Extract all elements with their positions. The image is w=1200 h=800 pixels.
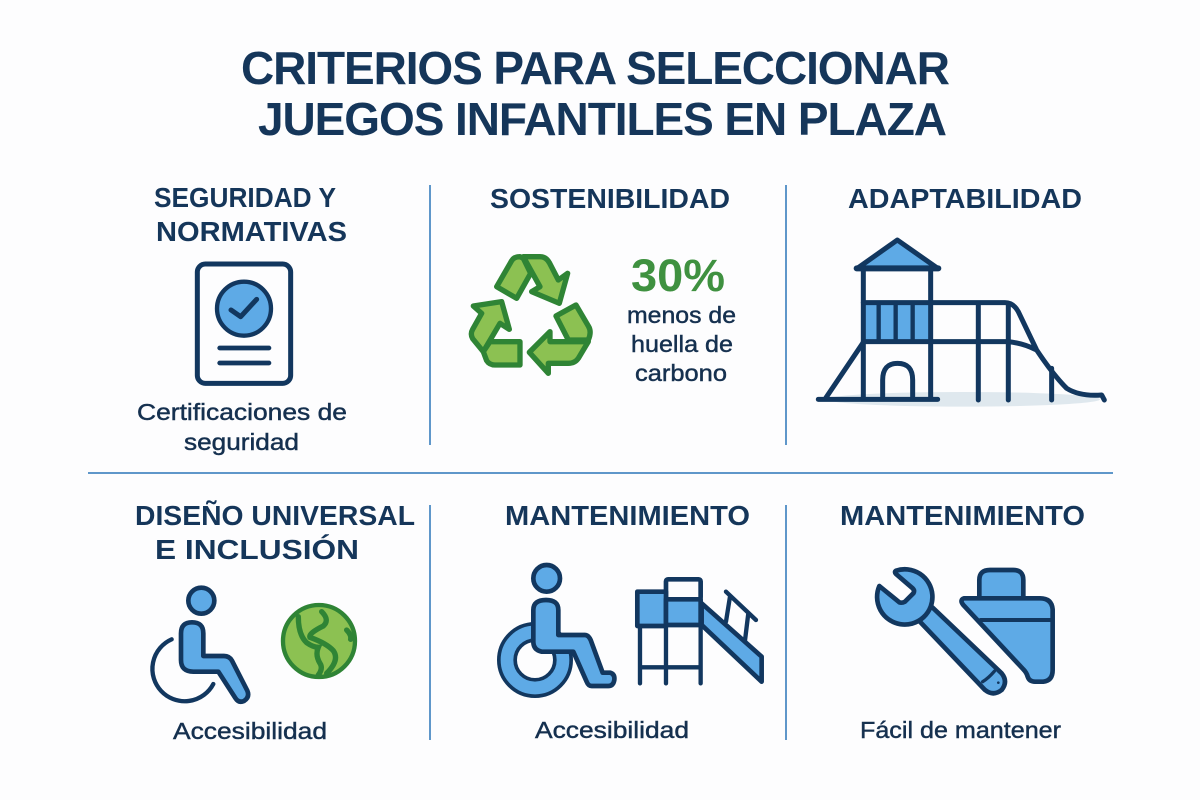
heading: adaptabilidad: ADAPTABILIDAD (848, 183, 1082, 214)
icon: play structure with slide (818, 240, 1104, 407)
icon: certificate document (197, 264, 291, 383)
icon: small slide (637, 579, 762, 683)
heading: seguridad y normativas: NORMATIVAS (156, 216, 347, 247)
caption: accesibilidad: Accesibilidad (535, 717, 689, 743)
icon: wrench (877, 569, 1005, 693)
stat: 30% menos de huella de carbono: 30% (631, 250, 725, 301)
heading: sostenibilidad: SOSTENIBILIDAD (490, 183, 730, 214)
caption: certificaciones: seguridad (184, 429, 299, 455)
panel: mantenimiento accesible (505, 500, 762, 743)
panel: seguridad y normativas (137, 182, 347, 455)
caption: certificaciones (137, 399, 347, 455)
heading: mantenimiento: MANTENIMIENTO (840, 500, 1085, 531)
title (241, 42, 950, 145)
caption: accesibilidad: Accesibilidad (173, 718, 327, 744)
heading: diseno universal e inclusion (135, 500, 415, 565)
title: JUEGOS INFANTILES EN PLAZA (258, 93, 947, 145)
heading: diseno universal e inclusion: E INCLUSIÓN (155, 534, 359, 565)
panel: sostenibilidad (471, 183, 736, 386)
icon: recycling arrows (471, 257, 590, 373)
caption: certificaciones: Certificaciones de (137, 399, 347, 425)
heading: diseno universal e inclusion: DISEÑO UNIVERSAL (135, 500, 415, 531)
stat: 30% menos de huella de carbono: carbono (635, 360, 727, 386)
stat: 30% menos de huella de carbono (627, 250, 736, 386)
caption: facil de mantener: Fácil de mantener (860, 717, 1061, 743)
heading: seguridad y normativas (154, 182, 347, 247)
stat: 30% menos de huella de carbono: huella de (631, 331, 733, 357)
panel: diseno universal e inclusion (135, 500, 415, 744)
stat: 30% menos de huella de carbono: menos de (627, 302, 736, 328)
heading: seguridad y normativas: SEGURIDAD Y (154, 182, 336, 213)
heading: mantenimiento: MANTENIMIENTO (505, 500, 750, 531)
icon: wheelchair user outline (152, 588, 248, 702)
title: CRITERIOS PARA SELECCIONAR (241, 42, 950, 94)
panel: mantenimiento facil (840, 500, 1085, 743)
icon: wheelchair user solid (507, 565, 614, 688)
icon: globe (283, 605, 355, 677)
panel: adaptabilidad (818, 183, 1104, 407)
icon: bucket (961, 570, 1053, 682)
